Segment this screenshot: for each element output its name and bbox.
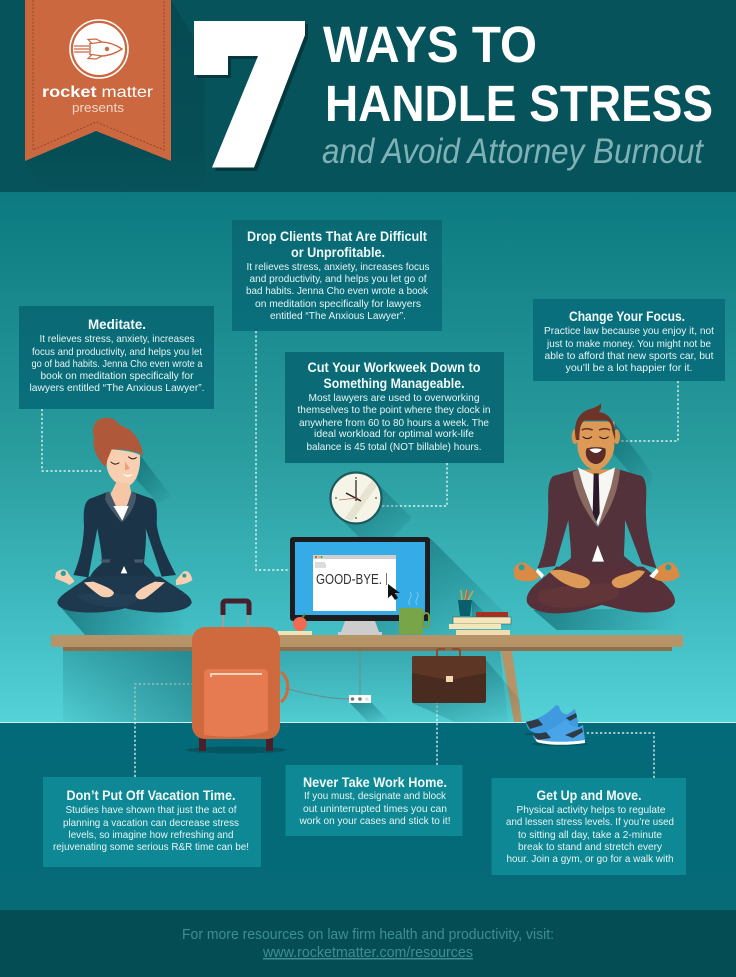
coffee mug [399, 592, 429, 634]
panel: meditate: focus and productivity, and helps you let [32, 346, 202, 358]
panel: work home [286, 765, 462, 836]
legs [57, 577, 192, 613]
back shoe [526, 705, 578, 734]
panel: work home: If you must, designate and block [304, 790, 447, 802]
hands [513, 562, 679, 581]
desk [51, 635, 683, 722]
hair [93, 418, 143, 467]
panel: drop clients: bad habits. Jenna Cho even wrote a book [246, 285, 429, 297]
panel: cut workweek: balance is 45 total (NOT billable) hours. [306, 441, 482, 453]
panel: meditate: It relieves stress, anxiety, increases [40, 333, 194, 345]
presents label: presents [72, 101, 124, 115]
panel: vacation: levels, so imagine how refreshing and [68, 829, 234, 841]
big numeral 7 [194, 21, 308, 171]
panel: change focus: Change Your Focus. [569, 309, 685, 324]
panel: get up and move: Physical activity helps to regulate [516, 804, 666, 816]
jacket [537, 468, 657, 577]
suitcase pocket [204, 669, 268, 737]
panel: cut workweek: anywhere from 60 to 80 hours a week. The [299, 417, 489, 429]
panel: drop clients: It relieves stress, anxiety, increases focus [246, 261, 430, 273]
panel: cut workweek [285, 352, 504, 463]
suitcase [63, 601, 288, 754]
apple on notebook [278, 614, 312, 635]
icon: mouse cursor [388, 584, 400, 600]
subtitle: and Avoid Attorney Burnout [322, 132, 704, 171]
panel: cut workweek: ideal workload for optimal work-life [314, 428, 474, 440]
panel: meditate: go of bad habits. Jenna Cho even wrote a [32, 358, 203, 370]
front shoe [533, 720, 585, 743]
ribbon badge [25, 0, 205, 192]
panel: get up and move: hour. Join a gym, or go for a walk with [506, 853, 674, 865]
panel: vacation: rejuvenating some serious R&R time can be! [53, 841, 249, 853]
footer: For more resources on law firm health and productivity, visit: [182, 926, 554, 943]
panel: get up and move: Get Up and Move. [536, 788, 642, 803]
panel: vacation [43, 777, 261, 867]
icon: rocket logo [70, 20, 128, 78]
panel: cut workweek: Something Manageable. [324, 376, 464, 391]
panel: drop clients: or Unprofitable. [291, 245, 385, 260]
panel: change focus [533, 299, 725, 381]
panel: meditate: lawyers entitled “The Anxious Lawyer”. [30, 382, 204, 394]
panel: get up and move: and lessen stress levels. If you’re used [506, 816, 674, 828]
hair [575, 403, 615, 440]
feet [549, 570, 645, 588]
panel: work home: Never Take Work Home. [303, 775, 447, 790]
panel: drop clients: and productivity, and helps you let go of [250, 273, 427, 285]
feet [84, 582, 165, 599]
computer monitor [290, 537, 512, 635]
title [323, 16, 713, 132]
beard [586, 447, 606, 464]
panel: get up and move [492, 778, 686, 875]
panel: change focus: able to afford that new sports car, but [544, 350, 714, 362]
footer [182, 926, 554, 961]
panel: drop clients: entitled “The Anxious Lawyer”. [270, 310, 406, 322]
panel: drop clients: on meditation specifically for lawyers [255, 298, 421, 310]
browser window [313, 555, 396, 611]
power strip and cable [285, 651, 390, 722]
panel: change focus: you’ll be a lot happier for it. [566, 362, 692, 374]
logo wordmark: rocket matter [42, 84, 154, 101]
clock [330, 472, 412, 554]
sneakers [524, 705, 588, 746]
hands [55, 569, 192, 585]
title: WAYS TO [323, 16, 537, 73]
legs [527, 567, 675, 613]
panel: meditate [19, 306, 214, 409]
suitcase handle [223, 614, 248, 627]
panel: get up and move: break to stand and stretch every [518, 841, 663, 853]
under desk shadow [63, 651, 508, 722]
panel: meditate: book on meditation specifically for [40, 370, 194, 382]
panel: vacation: Don’t Put Off Vacation Time. [66, 788, 236, 803]
person: meditating man [513, 403, 679, 630]
panel: drop clients: Drop Clients That Are Difficult [247, 229, 427, 244]
panel: meditate: Meditate. [88, 317, 146, 332]
jacket [73, 492, 176, 587]
briefcase [412, 649, 520, 722]
shirt and tie [578, 467, 615, 527]
monitor stand [338, 621, 382, 635]
panel: cut workweek: Most lawyers are used to overworking [308, 392, 480, 404]
panel: work home: work on your cases and stick to it! [299, 815, 450, 827]
panel: cut workweek: Cut Your Workweek Down to [308, 360, 480, 375]
panel: drop clients [232, 220, 442, 331]
panel: cut workweek: themselves to the point where they clock in [298, 404, 491, 416]
pencil cup and books [449, 590, 511, 635]
footer: www.rocketmatter.com/resources [262, 944, 473, 961]
connector dashed lines [42, 331, 678, 778]
panel: change focus: Practice law because you enjoy it, not [544, 325, 714, 337]
person: meditating woman [55, 418, 192, 635]
browser window: GOOD-BYE. [316, 572, 382, 588]
face [107, 449, 140, 486]
head [572, 429, 578, 444]
panel: vacation: planning a vacation can decrease stress [63, 817, 239, 829]
panel: vacation: Studies have shown that just the act of [66, 804, 237, 816]
panel: get up and move: to sitting all day, take a 2-minute [518, 829, 662, 841]
panel: work home: out uninterrupted times you can [303, 803, 447, 815]
panel: change focus: just to make money. You might not be [546, 338, 711, 350]
